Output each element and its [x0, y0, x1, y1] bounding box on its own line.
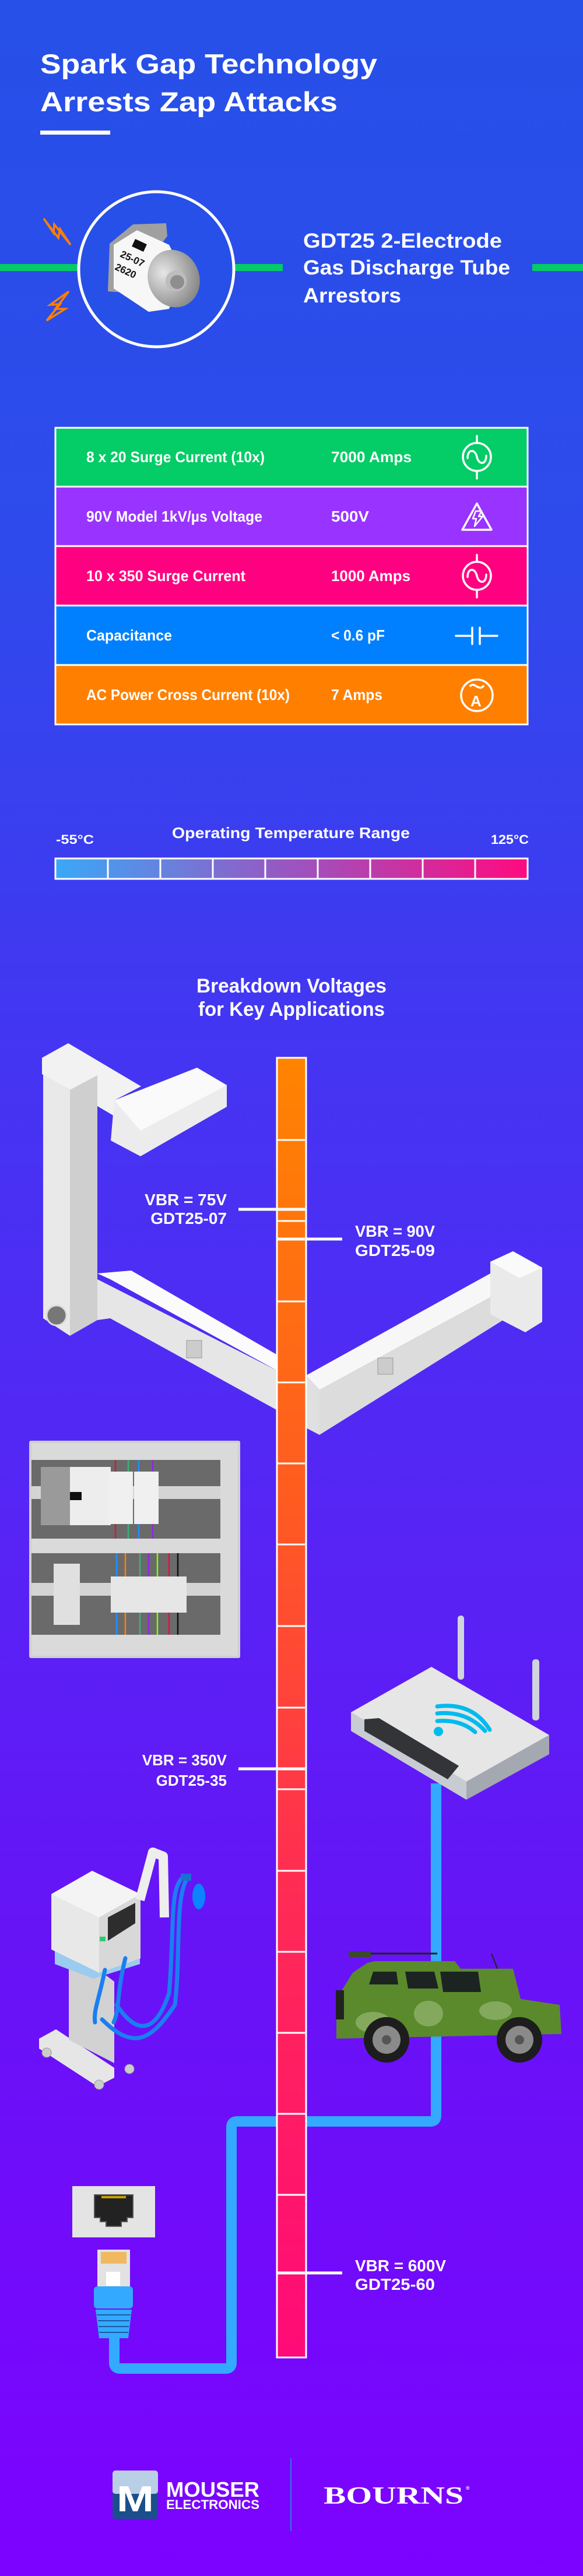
row: AC power cross current: AC Power Cross Current (10x) — [86, 686, 290, 703]
callout: VBR 600V: GDT25-60 — [355, 2275, 435, 2293]
row: 8x20 surge current: 8 x 20 Surge Current (10x) — [86, 448, 265, 466]
heading: breakdown voltages: Breakdown Voltages — [196, 975, 387, 997]
callout: VBR 75V: VBR = 75V — [145, 1191, 227, 1209]
callout: VBR 90V — [277, 1222, 435, 1259]
callout: VBR 75V: GDT25-07 — [150, 1209, 227, 1227]
logo: Bourns: ® — [466, 2485, 470, 2491]
logo divider — [290, 2458, 292, 2531]
row: 10x350 surge current — [55, 546, 528, 606]
product circle: GDT component: 25-07 — [118, 248, 146, 269]
title underline — [40, 131, 110, 135]
subtitle: product name: GDT25 2-Electrode — [303, 230, 502, 252]
illustration: ethernet plug — [94, 2250, 133, 2338]
row: AC power cross current: 7 Amps — [331, 686, 382, 703]
row: AC power cross current: A — [470, 692, 482, 710]
green signal line — [0, 264, 583, 271]
logo: Bourns: BOURNS — [324, 2483, 463, 2510]
illustration: medical ventilator — [39, 1852, 205, 2089]
temperature range: Operating Temperature Range — [172, 824, 410, 842]
temperature gradient bar — [55, 858, 528, 879]
row: capacitance: < 0.6 pF — [331, 627, 385, 644]
illustration: ethernet port — [72, 2186, 155, 2237]
heading: breakdown voltages: for Key Applications — [198, 998, 385, 1020]
temperature range: -55°C — [56, 832, 94, 847]
row: 8x20 surge current: 7000 Amps — [331, 448, 412, 466]
row: 8x20 surge current — [55, 428, 528, 487]
logo: Mouser Electronics: M — [117, 2479, 154, 2519]
subtitle: product name: Arrestors — [303, 284, 401, 307]
illustration: HVAC ducts — [42, 1043, 542, 1435]
icon: lightning bolts — [44, 219, 71, 321]
title: Spark Gap Technology — [40, 48, 377, 79]
callout: VBR 350V: GDT25-35 — [156, 1772, 227, 1789]
callout: VBR 90V: GDT25-09 — [355, 1241, 435, 1259]
callout: VBR 600V — [277, 2257, 446, 2293]
product circle: GDT component — [79, 192, 234, 347]
row: 10x350 surge current: 10 x 350 Surge Current — [86, 567, 245, 585]
title: Arrests Zap Attacks — [40, 86, 338, 117]
callout: VBR 600V: VBR = 600V — [355, 2257, 446, 2275]
subtitle: product name: Gas Discharge Tube — [303, 256, 510, 279]
row: capacitance: Capacitance — [86, 627, 172, 644]
callout: VBR 350V — [142, 1751, 306, 1789]
panel: specifications table — [55, 428, 528, 724]
blue network cable — [114, 1783, 436, 2369]
illustration: wifi router — [351, 1616, 549, 1800]
logo: Mouser Electronics — [113, 2471, 259, 2519]
temperature range: 125°C — [491, 832, 529, 847]
illustration: military vehicle — [336, 1951, 561, 2063]
logo: Mouser Electronics: MOUSER — [166, 2478, 259, 2501]
product circle: GDT component: 2620 — [113, 261, 138, 281]
row: 90V model voltage — [55, 487, 528, 546]
illustration: electrical control panel — [29, 1441, 240, 1658]
callout: VBR 350V: VBR = 350V — [142, 1751, 227, 1769]
heading: breakdown voltages — [196, 975, 387, 1020]
callout: VBR 90V: VBR = 90V — [355, 1222, 435, 1240]
row: 90V model voltage: 90V Model 1kV/µs Voltage — [86, 508, 262, 525]
temperature range — [55, 824, 529, 879]
callout: VBR 75V — [145, 1191, 306, 1227]
row: 10x350 surge current: 1000 Amps — [331, 567, 410, 585]
title — [40, 48, 377, 117]
row: AC power cross current — [55, 665, 528, 724]
chart: breakdown voltage scale bar — [277, 1058, 306, 2357]
logo: Mouser Electronics: ELECTRONICS — [166, 2497, 259, 2512]
logo: Bourns — [324, 2483, 470, 2510]
row: 90V model voltage: 500V — [331, 508, 370, 525]
row: capacitance — [55, 606, 528, 665]
subtitle: product name — [303, 230, 510, 307]
